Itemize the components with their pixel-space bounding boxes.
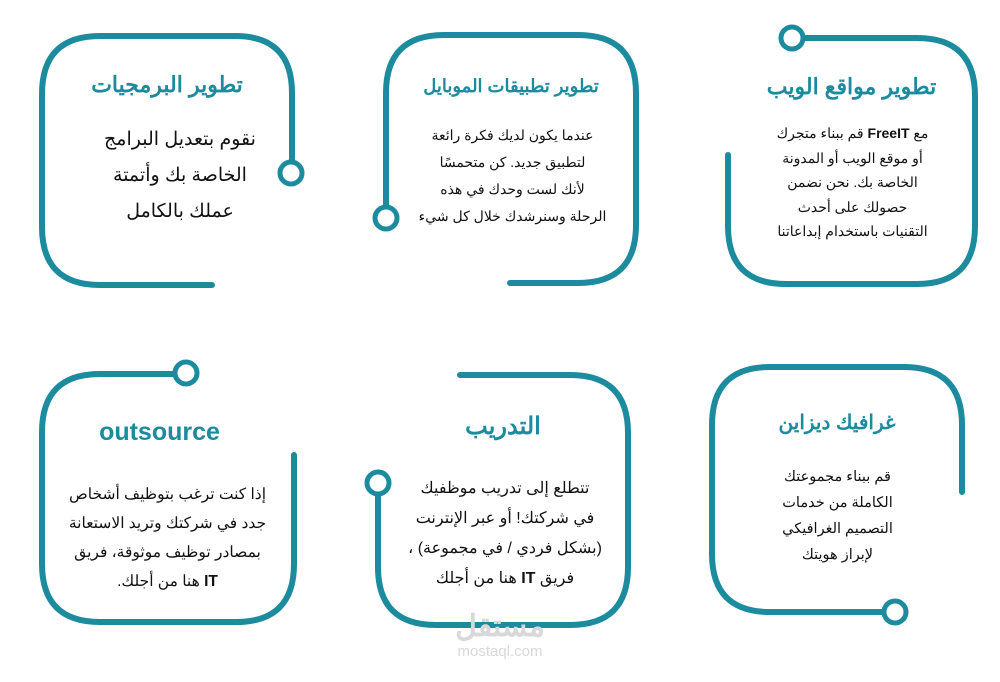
text: graphic: الكاملة من خدمات	[782, 495, 893, 511]
text: training: فريق IT هنا من أجلك	[436, 570, 574, 587]
text: mobile	[419, 127, 606, 224]
text: mobile: لتطبيق جديد. كن متحمسًا	[440, 154, 585, 170]
text: software: عملك بالكامل	[126, 201, 234, 222]
text: graphic: قم ببناء مجموعتك	[784, 469, 891, 485]
text: web: التقنيات باستخدام إبداعاتنا	[777, 223, 928, 239]
text: training: تتطلع إلى تدريب موظفيك	[421, 480, 589, 497]
text: graphic: لإبراز هويتك	[802, 547, 873, 563]
text: mobile: عندما يكون لديك فكرة رائعة	[432, 127, 594, 143]
text: web: مع FreeIT قم ببناء متجرك	[777, 125, 928, 141]
watermark: مستقل	[455, 610, 545, 643]
frame: web	[728, 27, 975, 284]
title: outsource: outsource	[99, 418, 220, 446]
text: software	[104, 129, 256, 222]
text: mobile: الرحلة وسنرشدك خلال كل شيء	[419, 208, 606, 224]
watermark: mostaql.com	[457, 643, 543, 660]
text: software: نقوم بتعديل البرامج	[104, 129, 256, 150]
title: training: التدريب	[465, 413, 541, 440]
frame: mobile	[375, 35, 636, 283]
text: software: الخاصة بك وأتمتة	[113, 165, 247, 186]
watermark	[455, 610, 545, 660]
text: training: (بشكل فردي / في مجموعة) ،	[408, 540, 602, 557]
text: training	[408, 480, 602, 587]
text: web: حصولك على أحدث	[798, 198, 907, 214]
frame: graphic	[712, 367, 962, 623]
text: training: في شركتك! أو عبر الإنترنت	[416, 510, 594, 527]
title: software: تطوير البرمجيات	[91, 72, 243, 97]
text: graphic	[782, 469, 893, 563]
title: mobile: تطوير تطبيقات الموبايل	[423, 76, 599, 96]
text: outsource: بمصادر توظيف موثوقة، فريق	[74, 544, 261, 561]
text: outsource: إذا كنت ترغب بتوظيف أشخاص	[69, 486, 266, 503]
text: web	[777, 125, 928, 240]
frame: software	[42, 36, 302, 285]
text: web: الخاصة بك. نحن نضمن	[787, 174, 918, 190]
frame: outsource	[42, 362, 294, 622]
text: web: أو موقع الويب أو المدونة	[782, 150, 923, 166]
text: mobile: لأنك لست وحدك في هذه	[440, 181, 585, 197]
frame: training	[367, 375, 628, 625]
text: graphic: التصميم الغرافيكي	[782, 521, 893, 537]
title: web: تطوير مواقع الويب	[767, 74, 936, 99]
text: outsource: IT هنا من أجلك.	[117, 573, 218, 590]
title: graphic: غرافيك ديزاين	[779, 412, 895, 434]
text: outsource: جدد في شركتك وتريد الاستعانة	[69, 515, 266, 532]
text: outsource	[69, 484, 266, 590]
